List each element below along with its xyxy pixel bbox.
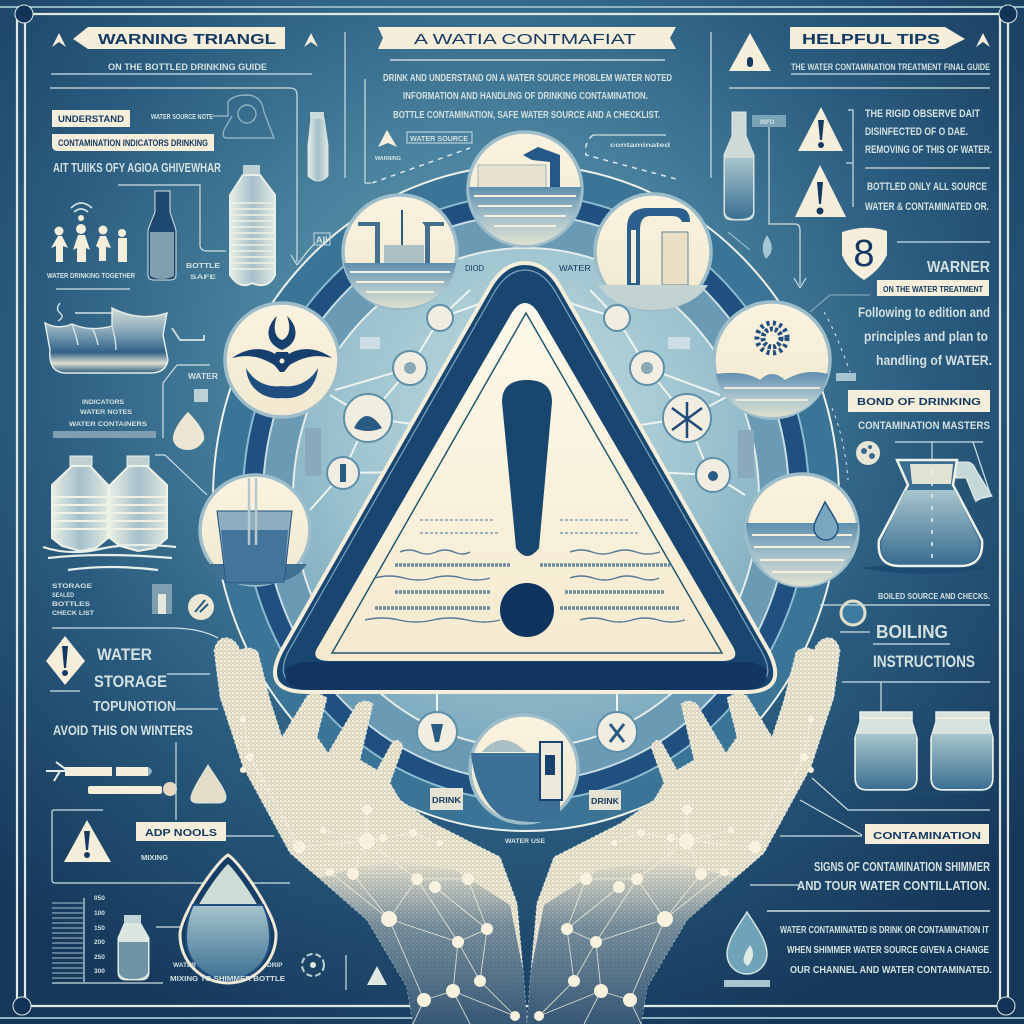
text block: boiling instructions: INSTRUCTIONS <box>873 652 975 671</box>
text block: notes below beakers: WATER NOTES <box>80 409 133 416</box>
icon: shield number 8 <box>842 228 887 280</box>
text block: warner: ON THE WATER TREATMENT <box>883 284 984 294</box>
arc labels on ring: DIOD <box>465 264 484 273</box>
chart: striped gauge: 100 <box>94 910 105 917</box>
icon: flame mark <box>728 232 771 258</box>
connector frame left <box>50 88 315 265</box>
medallion: faucet <box>595 194 711 310</box>
icon: large water drop <box>170 855 285 983</box>
label: small bottle notes <box>186 233 330 281</box>
text block: labels left <box>52 110 221 175</box>
central ring <box>213 165 839 831</box>
label boxes below center: DRINK <box>591 797 619 806</box>
label boxes below center <box>430 788 621 845</box>
chart: striped gauge: 300 <box>94 968 105 975</box>
label: add tools: ADP NOOLS <box>145 827 217 839</box>
medallion: biohazard <box>225 303 339 417</box>
text block: jug notes: STORAGE <box>52 584 92 590</box>
heading: water contaminant <box>378 27 676 60</box>
icon: glass jug: BOILED SOURCE AND CHECKS. <box>878 591 990 601</box>
chart: striped gauge: 150 <box>94 925 105 932</box>
text block: jug notes: SEALED <box>52 593 75 599</box>
icon: wifi and family: WATER DRINKING TOGETHER <box>47 273 135 280</box>
label boxes below center: DRINK <box>432 796 461 805</box>
label: boil drinking: CONTAMINATION MASTERS <box>858 420 990 432</box>
text block: labels left: UNDERSTAND <box>58 114 125 124</box>
icon: flame drop <box>191 765 226 803</box>
vertical dividers top <box>345 32 711 178</box>
text block: notes below beakers: INDICATORS <box>82 399 125 406</box>
text block: water storage <box>52 628 218 738</box>
callout top left: WARNING <box>375 156 401 162</box>
heading: helpful tips: HELPFUL TIPS <box>802 32 940 48</box>
icon: glass jug <box>860 442 992 601</box>
icon: paired warning triangles <box>795 107 853 217</box>
label: add tools <box>136 822 274 862</box>
icon: warning diamond <box>46 636 85 691</box>
icon: molecule badge <box>856 441 880 465</box>
icon: syringes <box>46 742 177 820</box>
connector box lower left <box>52 810 290 883</box>
text block: tips: DISINFECTED OF O DAE. <box>865 126 968 138</box>
text block: tips: WATER & CONTAMINATED OR. <box>865 201 989 213</box>
icon: small droplet <box>173 412 204 450</box>
right hand <box>527 638 840 1024</box>
text block: water storage: TOPUNOTION <box>93 698 176 715</box>
icon: thin bottle <box>308 112 328 181</box>
arc labels on ring <box>305 264 754 478</box>
text block: notes below beakers: WATER CONTAINERS <box>69 421 148 428</box>
heading: warning triangle <box>52 27 318 49</box>
icon: glass bottle <box>148 191 176 280</box>
text block: water storage: WATER <box>97 645 152 664</box>
connector bottle <box>118 185 226 251</box>
text block: jug notes: BOTTLES <box>52 602 90 608</box>
text block: warner: Following to edition and <box>858 304 990 320</box>
text block: notes below beakers <box>53 365 218 438</box>
heading: water contaminant: A WATIA CONTMAFIAT <box>414 32 636 48</box>
text block: intro: DRINK AND UNDERSTAND ON A WATER SOURCE PROBLEM WATER NOTED <box>383 73 672 84</box>
icon: warning triangle lower left <box>64 820 111 862</box>
icon: beakers of water <box>45 303 204 373</box>
callout top left <box>365 80 472 183</box>
text block: water storage: STORAGE <box>94 672 167 691</box>
wavy lines on sign <box>365 520 685 622</box>
icon: two water jugs <box>43 455 207 570</box>
icon: large water drop: MIXING TO SHIMMER BOTTLE <box>170 976 285 983</box>
text block: intro: INFORMATION AND HANDLING OF DRINKING CONTAMINATION. <box>403 91 648 102</box>
text block: tips: BOTTLED ONLY ALL SOURCE <box>867 181 987 193</box>
chart: striped gauge: 250 <box>94 954 105 961</box>
icon: protective hood <box>213 95 274 138</box>
medallion: glass of water <box>200 475 310 585</box>
label: small bottle notes: BOTTLE <box>186 263 220 270</box>
text block: intro: BOTTLE CONTAMINATION, SAFE WATER SOURCE AND A CHECKLIST. <box>393 110 660 121</box>
text block: closing notes <box>780 925 992 976</box>
subheading left: ON THE BOTTLED DRINKING GUIDE <box>108 62 267 72</box>
medallion: virus over water <box>714 302 830 418</box>
icon: bottle right <box>724 112 806 288</box>
exclamation mark <box>500 380 554 637</box>
text block: contamination signs <box>750 778 990 911</box>
text block: jug notes <box>52 584 214 620</box>
icon: small jar <box>118 915 180 980</box>
chart: striped gauge: 200 <box>94 939 105 946</box>
text block: tips: THE RIGID OBSERVE DAIT <box>865 108 980 120</box>
text block: boiling instructions: BOILING <box>876 622 948 642</box>
medallion: water drop over lake <box>746 474 858 586</box>
label: small bottle notes: SAFE <box>190 275 216 281</box>
icon: large water drop: DRIP <box>267 962 283 969</box>
icon: droplet bottom right <box>724 912 770 987</box>
callout top left: WATER SOURCE <box>410 136 468 143</box>
chart: striped gauge <box>52 895 163 983</box>
text block: water storage: AVOID THIS ON WINTERS <box>53 722 193 738</box>
heading: helpful tips <box>729 27 990 88</box>
medallion: bottom station <box>470 715 578 823</box>
text block: notes below beakers: WATER <box>188 372 218 381</box>
chart: striped gauge: 050 <box>94 895 105 902</box>
text block: warner: handling of WATER. <box>876 352 992 368</box>
text block: contamination signs: AND TOUR WATER CONTILLATION. <box>797 878 990 893</box>
callout top right: contaminated <box>610 142 670 149</box>
text block: labels left: WATER SOURCE NOTE <box>151 114 213 121</box>
icon: two jars <box>850 712 1000 795</box>
large warning triangle <box>275 263 775 692</box>
label boxes below center: WATER USE <box>505 839 545 845</box>
callout top right <box>586 135 680 180</box>
medallion: top tank and tap <box>468 132 582 246</box>
arc labels on ring: WATER <box>559 264 591 273</box>
text block: boiling instructions <box>820 601 990 712</box>
icon: ribbed plastic bottle <box>230 165 275 285</box>
text block: labels left: AIT TUIIKS OFY AGIOA GHIVEWHAR <box>53 160 221 175</box>
heading: warning triangle: WARNING TRIANGL <box>98 31 276 48</box>
label: boil drinking: BOND OF DRINKING <box>857 396 981 408</box>
label: add tools: MIXING <box>141 855 169 862</box>
icon: bottle right: INFO <box>760 120 775 126</box>
label: boil drinking <box>832 390 990 480</box>
icon: large water drop: WATER <box>173 962 196 969</box>
text block: jug notes: CHECK LIST <box>52 611 94 617</box>
small ring nodes and spokes <box>310 290 745 752</box>
medallion: pipes over water <box>343 195 457 309</box>
icon: wifi and family <box>47 203 135 289</box>
left hand <box>214 638 527 1024</box>
label: small bottle notes: AII <box>316 235 328 245</box>
text block: tips <box>865 108 992 213</box>
icon: shield number 8: 8 <box>853 233 875 275</box>
text block: warner <box>810 242 992 381</box>
icon: top warning triangle right <box>729 33 771 71</box>
text block: closing notes: OUR CHANNEL AND WATER CONTAMINATED. <box>790 965 992 976</box>
text block: warner: WARNER <box>927 259 990 276</box>
small icons under hand <box>302 954 387 990</box>
text block: labels left: CONTAMINATION INDICATORS DRINKING <box>58 138 208 148</box>
text block: contamination signs: CONTAMINATION <box>873 831 981 842</box>
text block: warner: principles and plan to <box>864 328 988 344</box>
text block: intro <box>383 73 672 121</box>
